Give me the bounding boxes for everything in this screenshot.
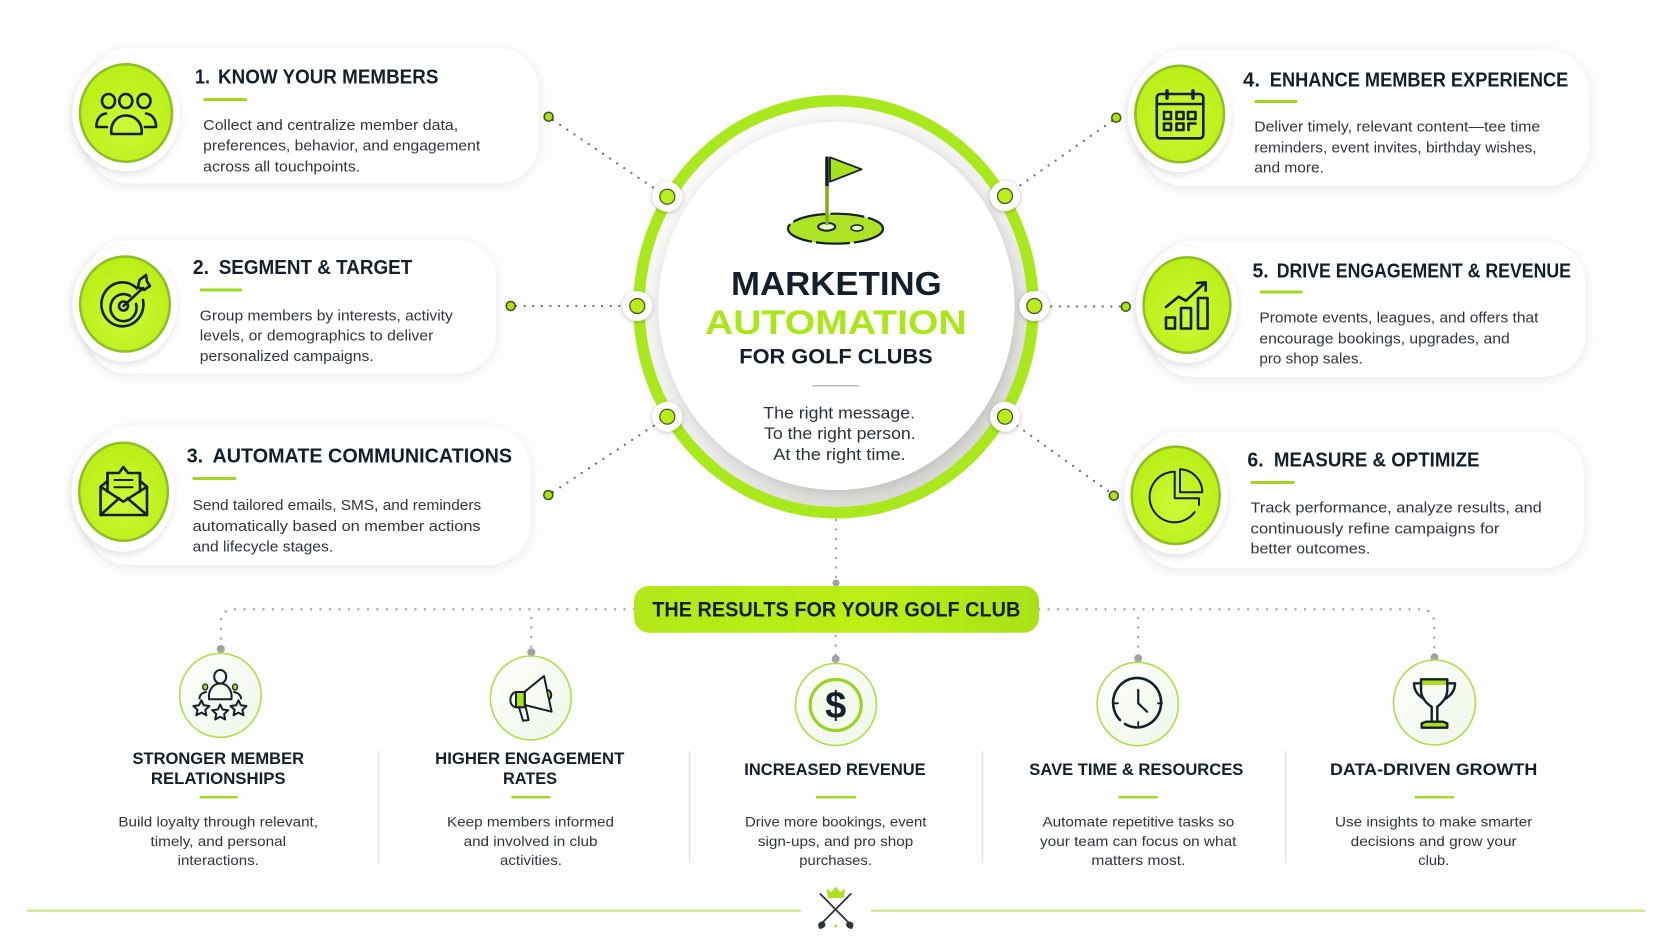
tagline: To the right person. bbox=[764, 424, 916, 443]
heading: KNOW YOUR MEMBERS bbox=[218, 66, 438, 88]
text block: club. bbox=[1418, 852, 1449, 868]
connector lines: steps to hub bbox=[516, 120, 1120, 583]
text block: Use insights to make smarter bbox=[1335, 814, 1533, 830]
results banner: THE RESULTS FOR YOUR GOLF CLUB bbox=[652, 599, 1020, 622]
text block: across all touchpoints. bbox=[203, 158, 360, 176]
icon: crossed golf clubs with crown bbox=[818, 886, 854, 929]
tagline: The right message. bbox=[763, 403, 915, 422]
text block: Send tailored emails, SMS, and reminders bbox=[193, 497, 481, 514]
text block: Build loyalty through relevant, bbox=[118, 814, 318, 830]
heading: 1. bbox=[195, 66, 210, 88]
heading: HIGHER ENGAGEMENT bbox=[435, 750, 624, 768]
tagline: At the right time. bbox=[773, 445, 906, 464]
text block bbox=[1254, 119, 1540, 177]
text block: Promote events, leagues, and offers that bbox=[1259, 310, 1539, 327]
icon: golf flag on green bbox=[788, 157, 883, 244]
text block: decisions and grow your bbox=[1351, 833, 1517, 849]
tagline bbox=[763, 403, 916, 464]
heading: AUTOMATE COMMUNICATIONS bbox=[212, 445, 512, 467]
text block: Keep members informed bbox=[447, 814, 614, 830]
text block: reminders, event invites, birthday wishes, bbox=[1254, 139, 1537, 156]
result: increased revenue bbox=[744, 664, 927, 868]
text block: and lifecycle stages. bbox=[193, 538, 333, 556]
results banner bbox=[634, 586, 1039, 633]
text block: levels, or demographics to deliver bbox=[200, 328, 433, 345]
text block: encourage bookings, upgrades, and bbox=[1259, 330, 1510, 347]
icon: dollar coin bbox=[810, 680, 861, 730]
heading: STRONGER MEMBER bbox=[132, 750, 304, 768]
heading bbox=[435, 750, 624, 788]
text block bbox=[1040, 814, 1237, 868]
text block bbox=[745, 814, 927, 868]
title: FOR GOLF CLUBS bbox=[739, 345, 933, 368]
heading: 6. bbox=[1247, 450, 1264, 472]
heading: RATES bbox=[503, 770, 557, 788]
text block: purchases. bbox=[799, 852, 872, 868]
text block: Drive more bookings, event bbox=[745, 814, 927, 830]
heading: MEASURE & OPTIMIZE bbox=[1274, 450, 1480, 472]
panel: step 5 drive engagement and revenue bbox=[1136, 242, 1586, 377]
heading: 5. bbox=[1252, 260, 1269, 282]
text block: Automate repetitive tasks so bbox=[1042, 814, 1235, 830]
text block: pro shop sales. bbox=[1259, 350, 1363, 367]
icon: target with arrow bbox=[101, 275, 150, 326]
icon: clock bbox=[1113, 678, 1162, 727]
heading: DATA-DRIVEN GROWTH bbox=[1330, 761, 1537, 779]
text block: and more. bbox=[1254, 160, 1324, 177]
heading: 3. bbox=[187, 445, 203, 467]
text block: Track performance, analyze results, and bbox=[1250, 500, 1542, 517]
text block: better outcomes. bbox=[1250, 540, 1370, 557]
text block: activities. bbox=[500, 852, 562, 868]
connector end dots bbox=[217, 112, 1438, 663]
title: MARKETING bbox=[731, 265, 942, 302]
text block bbox=[118, 814, 318, 868]
panel: step 2 segment and target bbox=[72, 240, 496, 373]
heading: INCREASED REVENUE bbox=[744, 761, 926, 779]
panel: step 6 measure and optimize bbox=[1124, 432, 1584, 568]
heading: 2. bbox=[193, 257, 209, 279]
text block bbox=[1259, 310, 1539, 367]
icon: dollar coin: $ bbox=[825, 685, 846, 727]
icon: member with stars bbox=[193, 670, 246, 720]
heading: SEGMENT & TARGET bbox=[219, 257, 412, 279]
text block: personalized campaigns. bbox=[200, 348, 374, 365]
text block: and involved in club bbox=[464, 833, 598, 849]
text block: preferences, behavior, and engagement bbox=[203, 138, 481, 155]
panel: step 1 know your members bbox=[72, 48, 539, 183]
heading bbox=[132, 750, 304, 788]
panel: step 3 automate communications bbox=[72, 427, 530, 565]
heading: DRIVE ENGAGEMENT & REVENUE bbox=[1277, 260, 1571, 282]
text block: interactions. bbox=[178, 852, 259, 868]
text block bbox=[447, 814, 614, 868]
heading: SAVE TIME & RESOURCES bbox=[1029, 761, 1243, 779]
panel: central hub circle bbox=[622, 101, 1049, 513]
hub connector nodes bbox=[622, 181, 1049, 432]
icon: group of members bbox=[96, 94, 156, 134]
connector tree: results bbox=[221, 609, 1434, 657]
title bbox=[705, 265, 967, 368]
result: stronger member relationships bbox=[118, 653, 318, 868]
icon: megaphone bbox=[510, 676, 552, 721]
text block: Collect and centralize member data, bbox=[203, 117, 458, 134]
text block: your team can focus on what bbox=[1040, 833, 1237, 849]
title: AUTOMATION bbox=[705, 304, 967, 342]
heading: RELATIONSHIPS bbox=[151, 770, 286, 788]
text block bbox=[1250, 500, 1542, 557]
icon: pie chart bbox=[1150, 469, 1202, 522]
text block bbox=[193, 497, 481, 556]
text block bbox=[200, 308, 453, 365]
text block: Deliver timely, relevant content—tee time bbox=[1254, 119, 1540, 136]
icon: calendar bbox=[1157, 91, 1203, 138]
icon: envelope with letter bbox=[101, 467, 147, 515]
text block: automatically based on member actions bbox=[193, 518, 481, 535]
result: data-driven growth bbox=[1330, 660, 1537, 868]
text block bbox=[203, 117, 481, 176]
heading: ENHANCE MEMBER EXPERIENCE bbox=[1270, 70, 1568, 92]
result: save time and resources bbox=[1029, 662, 1243, 868]
text block: Group members by interests, activity bbox=[200, 308, 453, 325]
text block bbox=[1335, 814, 1533, 868]
text block: matters most. bbox=[1091, 852, 1185, 868]
result: higher engagement rates bbox=[435, 656, 624, 868]
panel: step 4 enhance member experience bbox=[1128, 50, 1589, 186]
text block: sign-ups, and pro shop bbox=[758, 833, 913, 849]
icon: trophy bbox=[1414, 679, 1455, 728]
text block: continuously refine campaigns for bbox=[1250, 520, 1500, 537]
text block: timely, and personal bbox=[150, 833, 286, 849]
heading: 4. bbox=[1243, 70, 1260, 92]
icon: rising bar chart bbox=[1166, 282, 1208, 328]
